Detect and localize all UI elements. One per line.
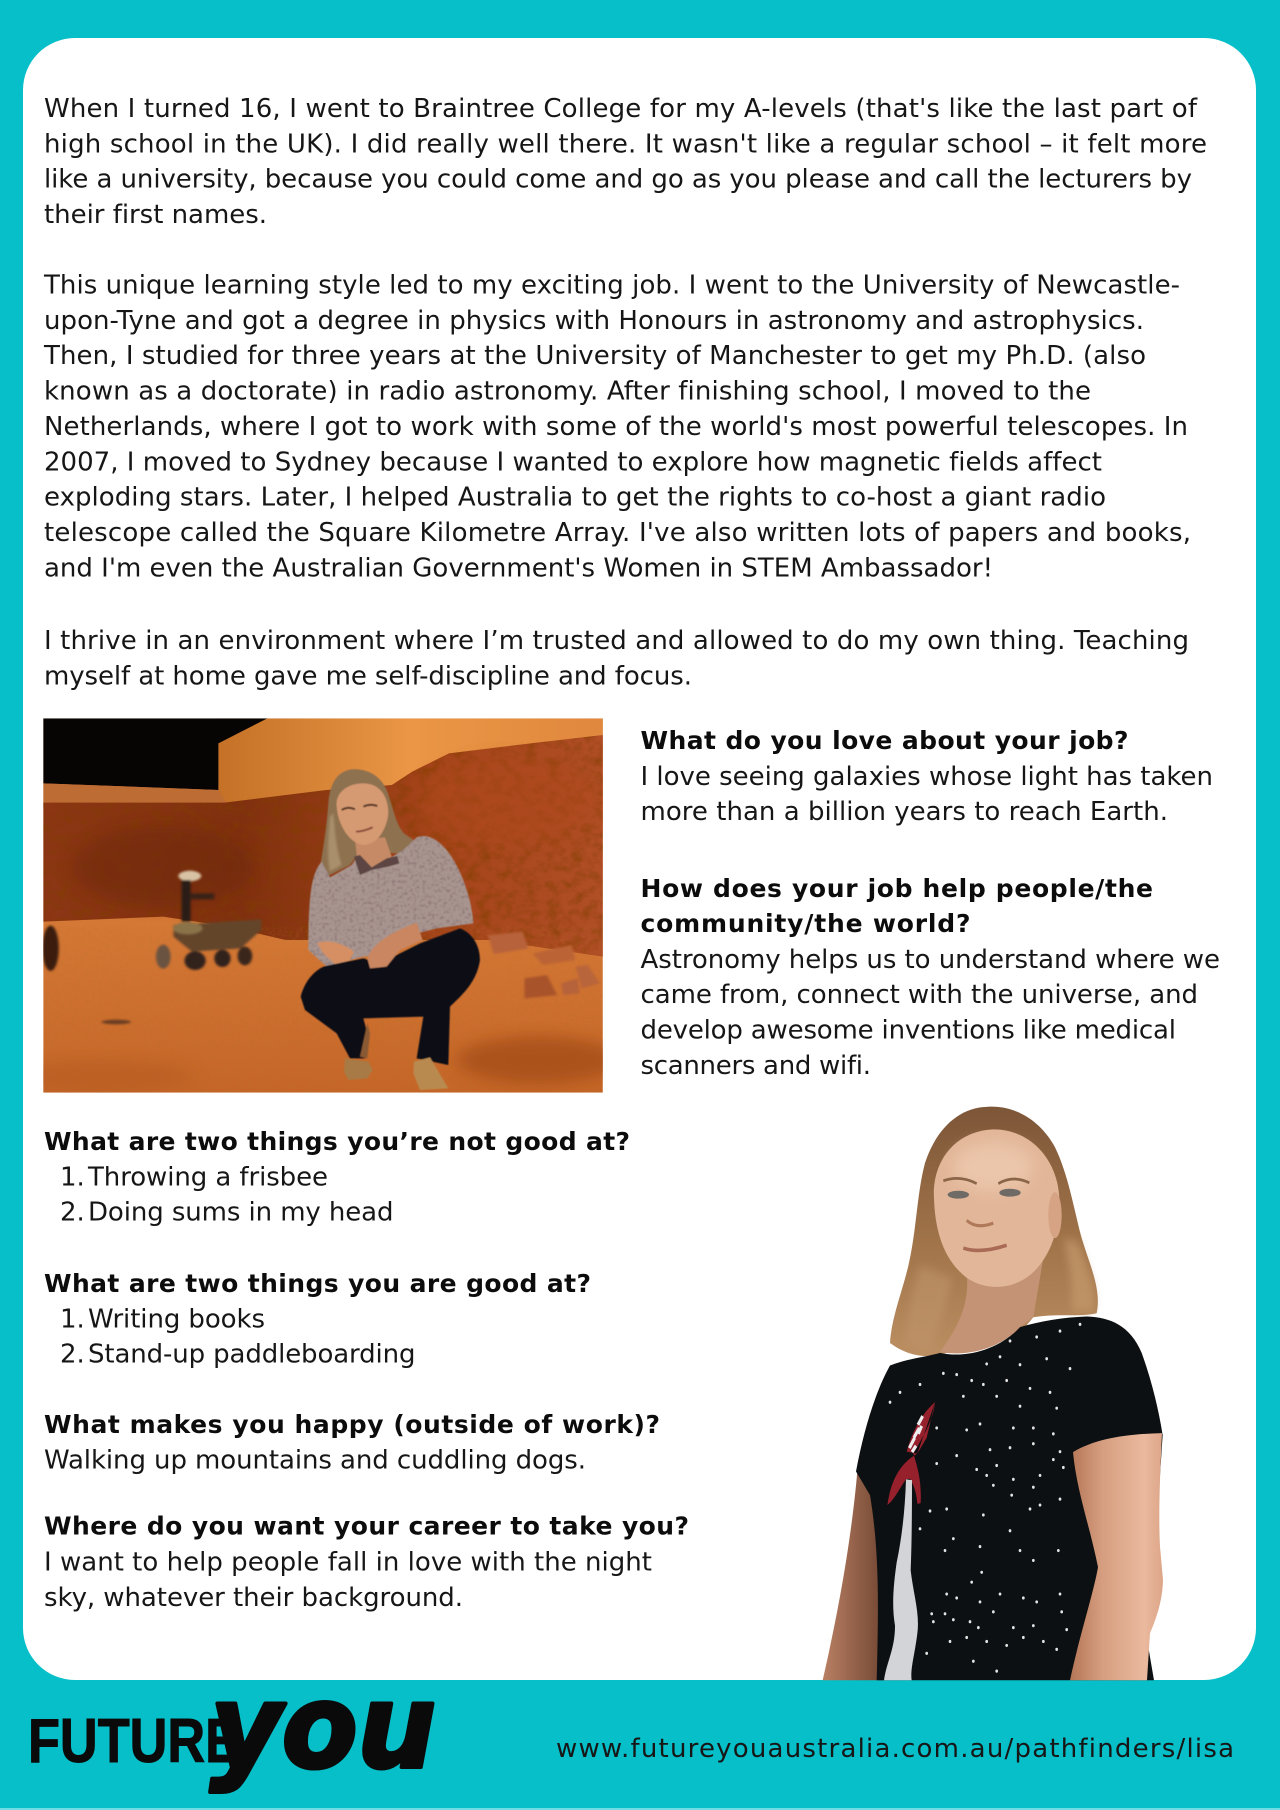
paragraph: career path: telescope called the Square Kilometre Array. I've also written lots of papers and books, <box>44 518 1191 548</box>
left column: questions and answers: sky, whatever their background. <box>44 1583 463 1613</box>
left column: questions and answers: Stand-up paddleboarding <box>88 1340 416 1370</box>
smoke trail <box>884 1479 918 1680</box>
rover <box>156 871 261 970</box>
Lisa figure in photo <box>301 769 480 1090</box>
paragraph: career path: upon-Tyne and got a degree in physics with Honours in astronomy and astrophysics. <box>44 306 1144 336</box>
left column: questions and answers: Throwing a frisbee <box>87 1162 328 1192</box>
intro paragraph: college <box>44 94 1207 230</box>
left column: questions and answers: What makes you happy (outside of work)? <box>44 1410 660 1439</box>
left column: questions and answers <box>44 1127 689 1613</box>
right column: love and impact: develop awesome inventions like medical <box>640 1016 1176 1046</box>
paragraph: career path: known as a doctorate) in radio astronomy. After finishing school, I moved to the <box>44 377 1091 407</box>
hair <box>890 1107 1098 1356</box>
bottom edge highlight <box>0 1808 1280 1810</box>
intro paragraph: college: high school in the UK). I did really well there. It wasn't like a regular school – it felt more <box>44 129 1207 159</box>
paragraph: self-discipline <box>44 626 1189 691</box>
left column: questions and answers: I want to help people fall in love with the night <box>44 1548 652 1578</box>
left column: questions and answers: Writing books <box>88 1304 265 1334</box>
right column: love and impact: How does your job help people/the <box>640 874 1153 903</box>
t-shirt <box>856 1316 1163 1680</box>
logo: Future You: you <box>210 1660 436 1795</box>
intro paragraph: college: like a university, because you could come and go as you please and call the lecturers by <box>44 165 1192 195</box>
left column: questions and answers: Doing sums in my head <box>88 1198 394 1228</box>
left column: questions and answers: What are two things you’re not good at? <box>44 1127 630 1156</box>
right column: love and impact: scanners and wifi. <box>640 1051 871 1081</box>
face <box>934 1129 1059 1287</box>
right column: love and impact: I love seeing galaxies whose light has taken <box>640 762 1213 792</box>
paragraph: career path: Netherlands, where I got to work with some of the world's most powerful telescopes. In <box>44 412 1188 442</box>
stars on shirt <box>890 1324 1080 1671</box>
right column: love and impact: community/the world? <box>640 909 970 938</box>
paragraph: career path: exploding stars. Later, I helped Australia to get the rights to co-host a giant radio <box>44 483 1106 513</box>
right column: love and impact: came from, connect with the universe, and <box>640 980 1198 1010</box>
rocks <box>42 926 600 1024</box>
logo: Future You <box>28 1660 436 1795</box>
right column: love and impact: What do you love about your job? <box>640 726 1128 755</box>
rocket <box>884 1402 935 1680</box>
paragraph: career path <box>43 271 1191 583</box>
left column: questions and answers: What are two things you are good at? <box>44 1269 591 1298</box>
paragraph: self-discipline: I thrive in an environment where I’m trusted and allowed to do my own thing. Teaching <box>44 626 1189 656</box>
website URL: www.futureyouaustralia.com.au/pathfinders/lisa <box>556 1734 1234 1764</box>
intro paragraph: college: When I turned 16, I went to Braintree College for my A-levels (that's like the last part of <box>44 94 1198 124</box>
portrait: Lisa in rocket t-shirt <box>823 1107 1163 1680</box>
left column: questions and answers: 1. <box>60 1162 85 1192</box>
paragraph: career path: This unique learning style led to my exciting job. I went to the University of Newcastle- <box>43 271 1180 301</box>
right column: love and impact: more than a billion years to reach Earth. <box>640 797 1168 827</box>
left column: questions and answers: 2. <box>60 1340 85 1370</box>
paragraph: career path: 2007, I moved to Sydney because I wanted to explore how magnetic fields affect <box>44 447 1102 477</box>
paragraph: self-discipline: myself at home gave me self-discipline and focus. <box>44 661 692 691</box>
right column: love and impact <box>640 726 1220 1081</box>
logo: Future You: FUTURE <box>28 1707 240 1776</box>
neck <box>940 1258 1043 1353</box>
right column: love and impact: Astronomy helps us to understand where we <box>640 945 1220 975</box>
left column: questions and answers: Where do you want your career to take you? <box>44 1512 689 1540</box>
paragraph: career path: and I'm even the Australian Government's Women in STEM Ambassador! <box>44 553 993 583</box>
right arm <box>1070 1433 1163 1680</box>
left column: questions and answers: Walking up mountains and cuddling dogs. <box>44 1446 586 1476</box>
left column: questions and answers: 2. <box>60 1198 85 1228</box>
left arm <box>823 1471 887 1680</box>
paragraph: career path: Then, I studied for three years at the University of Manchester to get my Ph.D. (also <box>43 341 1146 371</box>
photo: Lisa crouching in Mars yard <box>12 718 620 1093</box>
intro paragraph: college: their first names. <box>44 200 267 230</box>
left column: questions and answers: 1. <box>60 1304 85 1334</box>
